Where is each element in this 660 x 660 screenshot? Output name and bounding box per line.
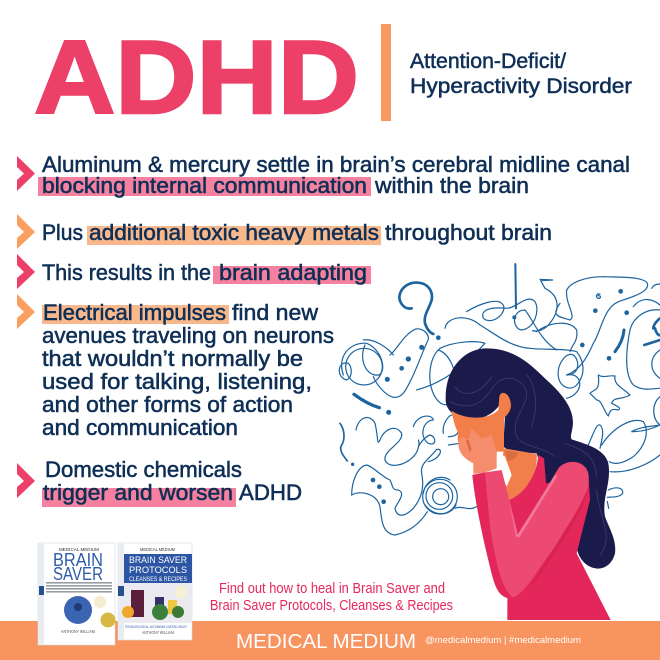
book: Brain Saver bbox=[38, 543, 116, 645]
sleeve left band bbox=[472, 472, 513, 598]
bullet 2 text: additional toxic heavy metals bbox=[89, 220, 379, 245]
bullet 2 text bbox=[42, 220, 552, 245]
neck shadow bbox=[505, 451, 518, 461]
author: ANTHONY WILLIAM bbox=[61, 629, 95, 634]
bullet 1 text: Aluminum & mercury settle in brain’s cerebral midline canal bbox=[42, 152, 630, 177]
highlight pink bbox=[42, 488, 236, 507]
bullet 2 text: throughout brain bbox=[385, 220, 552, 245]
bullet 2: toxic heavy metals bbox=[17, 214, 552, 249]
bullet 4 text: and other forms of action bbox=[42, 392, 293, 417]
highlight orange bbox=[42, 305, 229, 324]
photo of juices bbox=[122, 583, 192, 623]
brand name: MEDICAL MEDIUM bbox=[236, 631, 416, 653]
chevron icon orange bbox=[17, 294, 35, 329]
neck and chest bbox=[500, 448, 537, 501]
face bbox=[452, 393, 511, 463]
illustration: woman with tangled thoughts bbox=[339, 264, 660, 620]
book title: BRAIN SAVER bbox=[129, 555, 187, 566]
book publisher line: MEDICAL MEDIUM bbox=[140, 547, 175, 552]
book publisher line: MEDICAL MEDIUM bbox=[59, 547, 99, 552]
book description lines bbox=[46, 582, 112, 593]
woman figure bbox=[446, 348, 615, 620]
scribbles bbox=[339, 277, 660, 535]
bullet 5 text: Domestic chemicals bbox=[45, 457, 242, 482]
social handles: @medicalmedium | #medicalmedium bbox=[425, 635, 581, 646]
bullet 4 text bbox=[42, 300, 334, 440]
hair strands bbox=[450, 375, 606, 555]
bullet 3: brain adapting bbox=[17, 254, 371, 289]
hair bbox=[446, 348, 615, 569]
bullet 3 text: This results in the bbox=[42, 260, 211, 285]
bullet 4: electrical impulses bbox=[17, 294, 334, 440]
blueberry bbox=[64, 596, 92, 624]
caption: where to heal bbox=[210, 581, 453, 614]
highlight orange bbox=[87, 226, 381, 245]
bullet 3 text bbox=[42, 260, 367, 285]
bullet 5: domestic chemicals bbox=[17, 457, 302, 507]
subtitle: Hyperactivity Disorder bbox=[410, 75, 632, 98]
bullet 4 text: that wouldn’t normally be bbox=[42, 346, 303, 371]
tagline: FOR NEUROLOGICAL, AUTOIMMUNE & MENTAL HEALTH bbox=[125, 624, 187, 629]
symbols: question mark, exclamation mark, dots bbox=[340, 264, 660, 504]
hand bbox=[458, 428, 497, 474]
footer background bbox=[0, 621, 660, 660]
caption: where to heal: Brain Saver Protocols, Cleanses & Recipes bbox=[210, 598, 453, 614]
bullet 5 text: ADHD bbox=[239, 480, 302, 505]
author: ANTHONY WILLIAM bbox=[142, 630, 174, 635]
title panel bbox=[124, 554, 192, 583]
bullet 4 text: used for talking, listening, bbox=[42, 369, 312, 394]
title: ADHD: ADHD bbox=[34, 20, 359, 136]
chevron icon pink bbox=[17, 463, 35, 498]
bullet 2 text: Plus bbox=[42, 220, 83, 245]
book spine bbox=[118, 543, 124, 640]
bullet 1: aluminum and mercury bbox=[17, 152, 630, 198]
bullet 1 text: within the brain bbox=[374, 173, 529, 198]
chevron icon pink bbox=[17, 156, 35, 191]
footer bar bbox=[0, 621, 660, 660]
bullet 4 text: avenues traveling on neurons bbox=[42, 323, 334, 348]
book: Brain Saver Protocols bbox=[118, 543, 192, 640]
subtitle: Attention-Deficit/ bbox=[410, 50, 566, 73]
bullet 5 text: trigger and worsen bbox=[43, 480, 233, 505]
chevron icon orange bbox=[17, 214, 35, 249]
sleeve bbox=[472, 462, 589, 598]
subtitle bbox=[410, 50, 632, 98]
bullet 1 text: blocking internal communication bbox=[42, 173, 367, 198]
bullet 5 text bbox=[43, 457, 302, 505]
sleeve highlight bbox=[508, 475, 557, 537]
gold seals bbox=[94, 596, 106, 608]
sweater body bbox=[507, 455, 611, 620]
book title bbox=[129, 555, 188, 583]
bullet 4 text: and communication bbox=[42, 415, 238, 440]
book title: PROTOCOLS bbox=[129, 565, 187, 576]
book title: BRAIN bbox=[53, 550, 103, 570]
bullet 3 text: brain adapting bbox=[219, 260, 367, 285]
chevron icon pink bbox=[17, 254, 35, 289]
vertical divider bbox=[381, 24, 391, 121]
neck gap bbox=[497, 451, 512, 487]
sleeve underside shadow bbox=[527, 487, 588, 589]
bullet 4 text: find new bbox=[232, 300, 318, 325]
book title: SAVER bbox=[53, 564, 103, 584]
finger shadow bbox=[466, 440, 472, 452]
book title bbox=[53, 550, 103, 584]
bullet 1 text bbox=[42, 152, 630, 198]
book cover bbox=[118, 543, 192, 640]
book spine bbox=[38, 543, 44, 645]
caption: where to heal: Find out how to heal in Brain Saver and bbox=[219, 581, 445, 597]
book title: CLEANSES & RECIPES bbox=[129, 576, 188, 583]
highlight pink bbox=[38, 177, 371, 196]
bullet 4 text: Electrical impulses bbox=[43, 300, 226, 325]
book cover bbox=[38, 543, 115, 645]
highlight pink bbox=[213, 266, 371, 284]
